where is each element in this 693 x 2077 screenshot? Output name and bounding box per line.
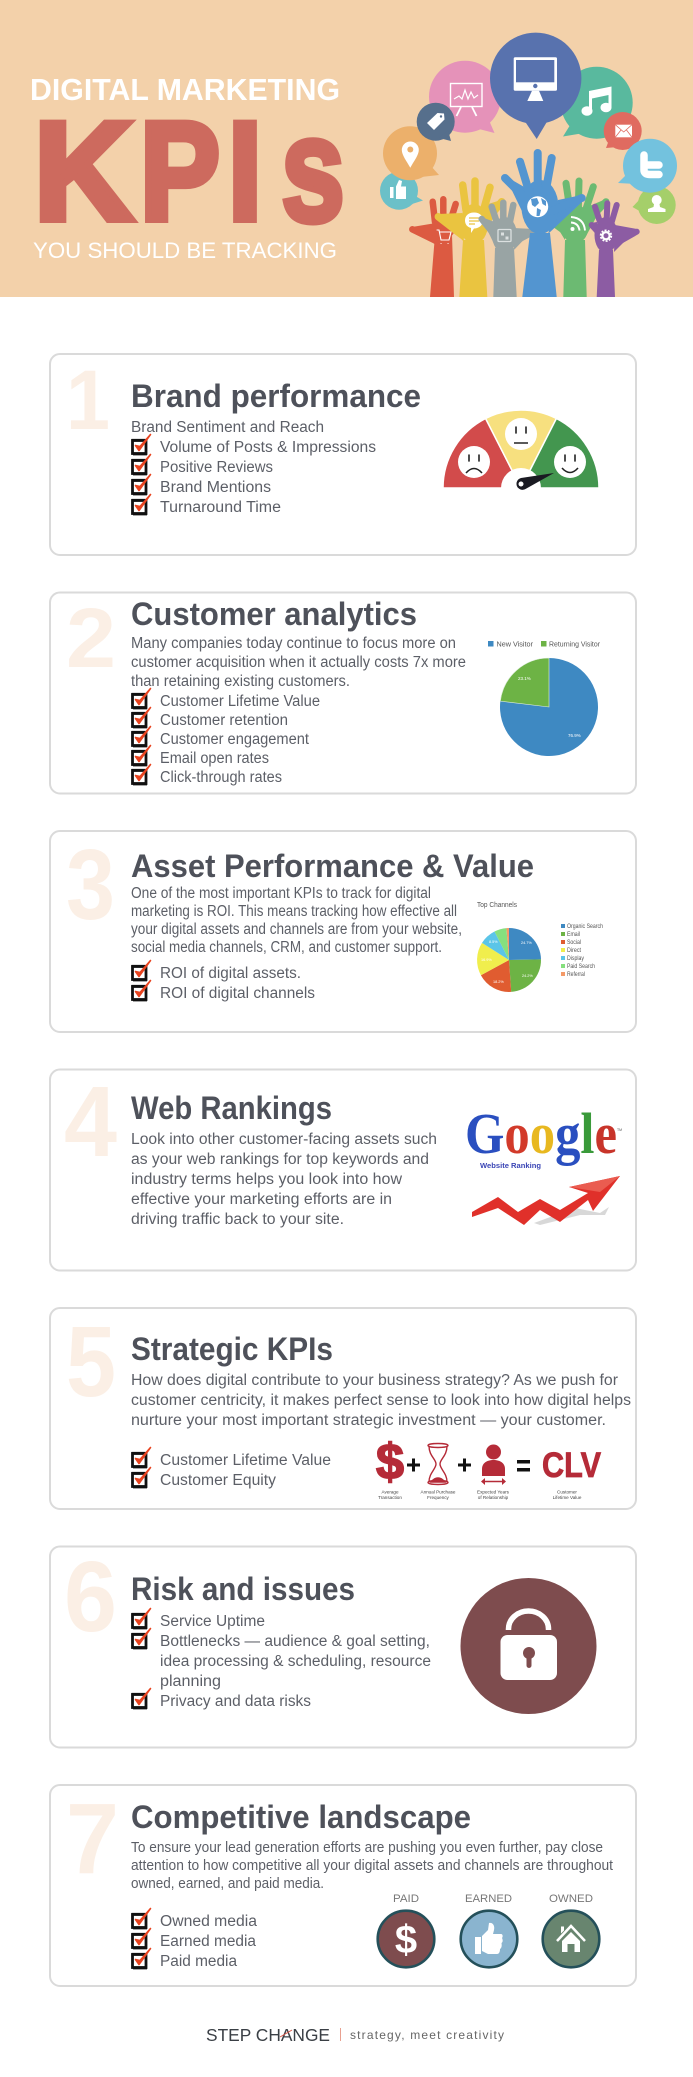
heading: competitive landscape: Competitive landscape: [131, 1799, 471, 1835]
paragraph: [131, 885, 462, 956]
panel 4: web rankings: [50, 1066, 636, 1270]
paragraph: [131, 635, 466, 690]
heading: risk and issues: Risk and issues: [131, 1571, 355, 1607]
pie chart: top channels: 18.2%: [493, 980, 504, 984]
formula captions: Frequency: [427, 1495, 450, 1500]
checklist: Customer Lifetime Value: [160, 1452, 331, 1469]
heading: web rankings: Web Rankings: [131, 1090, 332, 1126]
dollar sign: $: [376, 1434, 404, 1490]
heading: KPIs: s: [281, 85, 345, 253]
checklist: Click-through rates: [160, 769, 282, 786]
Google logo: Website Ranking: [480, 1161, 541, 1170]
media: paid: [378, 1893, 434, 1967]
face: happy: [554, 446, 586, 478]
checklist: Bottlenecks — audience & goal setting,: [160, 1633, 430, 1650]
checklist: [132, 1608, 431, 1710]
paragraph: To ensure your lead generation efforts are pushing you even further, pay close: [131, 1840, 603, 1856]
checklist: ROI of digital channels: [160, 985, 315, 1002]
checklist: [132, 1908, 257, 1970]
checklist: Positive Reviews: [160, 459, 273, 476]
panel 2: customer analytics: [50, 591, 636, 794]
checklist: Customer Lifetime Value: [160, 693, 320, 710]
hand: purple with gear: [591, 203, 637, 297]
paragraph: nurture your most important strategic investment — your customer.: [131, 1412, 606, 1429]
heading: strategic KPIs: Strategic KPIs: [131, 1331, 333, 1367]
bubble: person: [632, 186, 676, 224]
pie chart: visitors: 23.1%: [518, 676, 531, 681]
checklist: Paid media: [160, 1953, 237, 1970]
bubble: thumbs up: [380, 172, 423, 210]
chart title: Top Channels: [477, 902, 517, 909]
checklist: [132, 1448, 331, 1489]
legend: Referral: [567, 972, 585, 978]
formula captions: Average: [381, 1490, 399, 1494]
checklist: Turnaround Time: [160, 499, 281, 516]
number 7: 7: [66, 1783, 119, 1895]
heading: Digital Marketing: DIGITAL MARKETING: [30, 72, 340, 107]
heading: KPIs: K: [34, 92, 133, 250]
person with years arrow: [481, 1444, 506, 1485]
hourglass: [428, 1444, 448, 1484]
pie chart: visitors: [488, 641, 601, 756]
face: neutral: [505, 418, 537, 450]
bubble: computer monitor: [490, 33, 581, 139]
legend: Returning Visitor: [549, 642, 601, 648]
paragraph: your digital assets and channels are from your website,: [131, 921, 462, 938]
gauge: sentiment meter: [440, 410, 602, 508]
paragraph: than retaining existing customers.: [131, 673, 350, 690]
hand: yellow with chat: [438, 181, 502, 297]
paragraph: [131, 1131, 437, 1228]
bubble: email: [604, 112, 642, 150]
paragraph: One of the most important KPIs to track for digital: [131, 885, 431, 902]
media: owned: OWNED: [549, 1893, 593, 1905]
paragraph: industry terms helps you look into how: [131, 1171, 403, 1188]
equals: [517, 1460, 530, 1472]
footer: step change logo and tagline: strategy, meet creativity: [350, 2028, 504, 2042]
plus: [407, 1458, 420, 1472]
hand: green with RSS: [554, 181, 606, 297]
formula captions: Expected Years: [477, 1490, 510, 1494]
heading: brand performance: Brand performance: [131, 378, 421, 414]
paragraph: Many companies today continue to focus more on: [131, 635, 456, 652]
hand: red with cart: [412, 199, 456, 297]
formula captions: Transaction: [378, 1495, 402, 1500]
header banner: [0, 0, 693, 297]
paragraph: owned, earned, and paid media.: [131, 1876, 324, 1892]
paragraph: [131, 1840, 613, 1892]
needle: [516, 473, 554, 490]
heading: KPIs: P: [140, 92, 220, 250]
paragraph: marketing is ROI. This means tracking how effective all: [131, 903, 457, 920]
panel 5: strategic KPIs: [50, 1306, 636, 1509]
formula: customer lifetime value: [376, 1434, 602, 1500]
number 2: 2: [66, 591, 116, 685]
checklist: Volume of Posts & Impressions: [160, 439, 376, 456]
media: paid: PAID: [393, 1893, 419, 1905]
text: brand sentiment and reach: Brand Sentiment and Reach: [131, 419, 324, 436]
legend: Direct: [567, 948, 581, 954]
checklist: Earned media: [160, 1933, 256, 1950]
CLV: CLV: [542, 1446, 602, 1485]
checklist: [132, 434, 376, 516]
paragraph: How does digital contribute to your business strategy? As we push for: [131, 1372, 618, 1389]
panel 6: risk and issues: [50, 1541, 636, 1748]
legend: Social: [567, 940, 581, 946]
face: sad: [458, 446, 490, 478]
bubble: music: [561, 67, 633, 139]
illustration: speech bubbles and raised hands: [380, 33, 677, 297]
formula captions: Lifetime Value: [553, 1495, 582, 1500]
panel 7: competitive landscape: [50, 1783, 636, 1986]
icon: padlock: [460, 1578, 596, 1714]
panel 3: asset performance and value: [50, 829, 636, 1032]
formula captions: Customer: [557, 1490, 577, 1494]
checklist: Privacy and data risks: [160, 1693, 311, 1710]
bubble: location pin: [383, 126, 439, 180]
legend: Organic Search: [567, 924, 603, 930]
paragraph: effective your marketing efforts are in: [131, 1191, 392, 1208]
checklist: ROI of digital assets.: [160, 965, 301, 982]
media: paid: $: [395, 1918, 417, 1962]
heading: customer analytics: Customer analytics: [131, 596, 417, 632]
number 6: 6: [64, 1541, 117, 1653]
checklist: [132, 960, 315, 1002]
heading: KPIs: I: [228, 92, 262, 250]
pie chart: top channels: 16.9%: [481, 958, 492, 962]
checklist: Brand Mentions: [160, 479, 271, 496]
Google logo: TM: [617, 1128, 622, 1132]
number 3: 3: [66, 829, 115, 941]
Google logo: Google: [465, 1101, 617, 1166]
legend: Paid Search: [567, 964, 595, 970]
rising red arrow chart: [472, 1176, 620, 1225]
paragraph: customer centricity, it makes perfect sense to look into how digital helps: [131, 1392, 631, 1409]
checklist: Customer engagement: [160, 731, 310, 748]
legend: [488, 641, 601, 648]
legend: [561, 924, 603, 978]
checklist: Owned media: [160, 1913, 257, 1930]
media: owned: [543, 1893, 599, 1967]
checklist: Email open rates: [160, 750, 269, 767]
heading: asset performance and value: Asset Performance & Value: [131, 848, 534, 884]
plus: [458, 1458, 471, 1472]
checklist: [132, 688, 320, 786]
paragraph: as your web rankings for top keywords and: [131, 1151, 429, 1168]
paragraph: attention to how competitive all your digital assets and channels are throughout: [131, 1858, 613, 1874]
legend: Email: [567, 932, 580, 938]
formula captions: Annual Purchase: [420, 1490, 456, 1494]
bubble: twitter: [618, 139, 677, 193]
pie chart: top channels: 8.5%: [489, 940, 498, 944]
paragraph: [131, 1372, 631, 1429]
paragraph: Look into other customer-facing assets such: [131, 1131, 437, 1148]
pie chart: top channels: [477, 902, 603, 992]
pie chart: top channels: 24.2%: [522, 974, 533, 978]
checklist: Customer retention: [160, 712, 288, 729]
paragraph: driving traffic back to your site.: [131, 1211, 344, 1228]
footer: step change logo and tagline: [206, 2025, 504, 2045]
bubble: presentation chart: [429, 61, 501, 133]
media: earned: [461, 1893, 517, 1967]
formula captions: [378, 1490, 582, 1500]
number 1: 1: [66, 353, 110, 447]
paragraph: social media channels, CRM, and customer support.: [131, 939, 442, 956]
number 5: 5: [66, 1306, 116, 1418]
formula captions: of Relationship: [478, 1495, 509, 1500]
paragraph: customer acquisition when it actually costs 7x more: [131, 654, 466, 671]
media: earned: EARNED: [465, 1893, 512, 1905]
hand: blue with globe: [505, 153, 582, 297]
bubble: price tag: [417, 103, 455, 141]
checklist: Service Uptime: [160, 1613, 265, 1630]
number 4: 4: [64, 1066, 117, 1178]
panel 1: brand performance: [50, 353, 636, 555]
checklist: idea processing & scheduling, resource: [160, 1653, 431, 1670]
legend: Display: [567, 956, 584, 962]
heading: KPIs: [34, 85, 345, 253]
subheading: you should be tracking: YOU SHOULD BE TRACKING: [33, 238, 337, 263]
pie chart: visitors: 76.9%: [568, 733, 581, 738]
checklist: Customer Equity: [160, 1472, 276, 1489]
pie chart: top channels: 24.7%: [521, 941, 532, 945]
hand: gray with QR code: [481, 203, 534, 297]
checklist: planning: [160, 1673, 221, 1690]
legend: New Visitor: [496, 642, 534, 648]
footer: step change logo and tagline: STEP CHANGE: [206, 2025, 330, 2045]
